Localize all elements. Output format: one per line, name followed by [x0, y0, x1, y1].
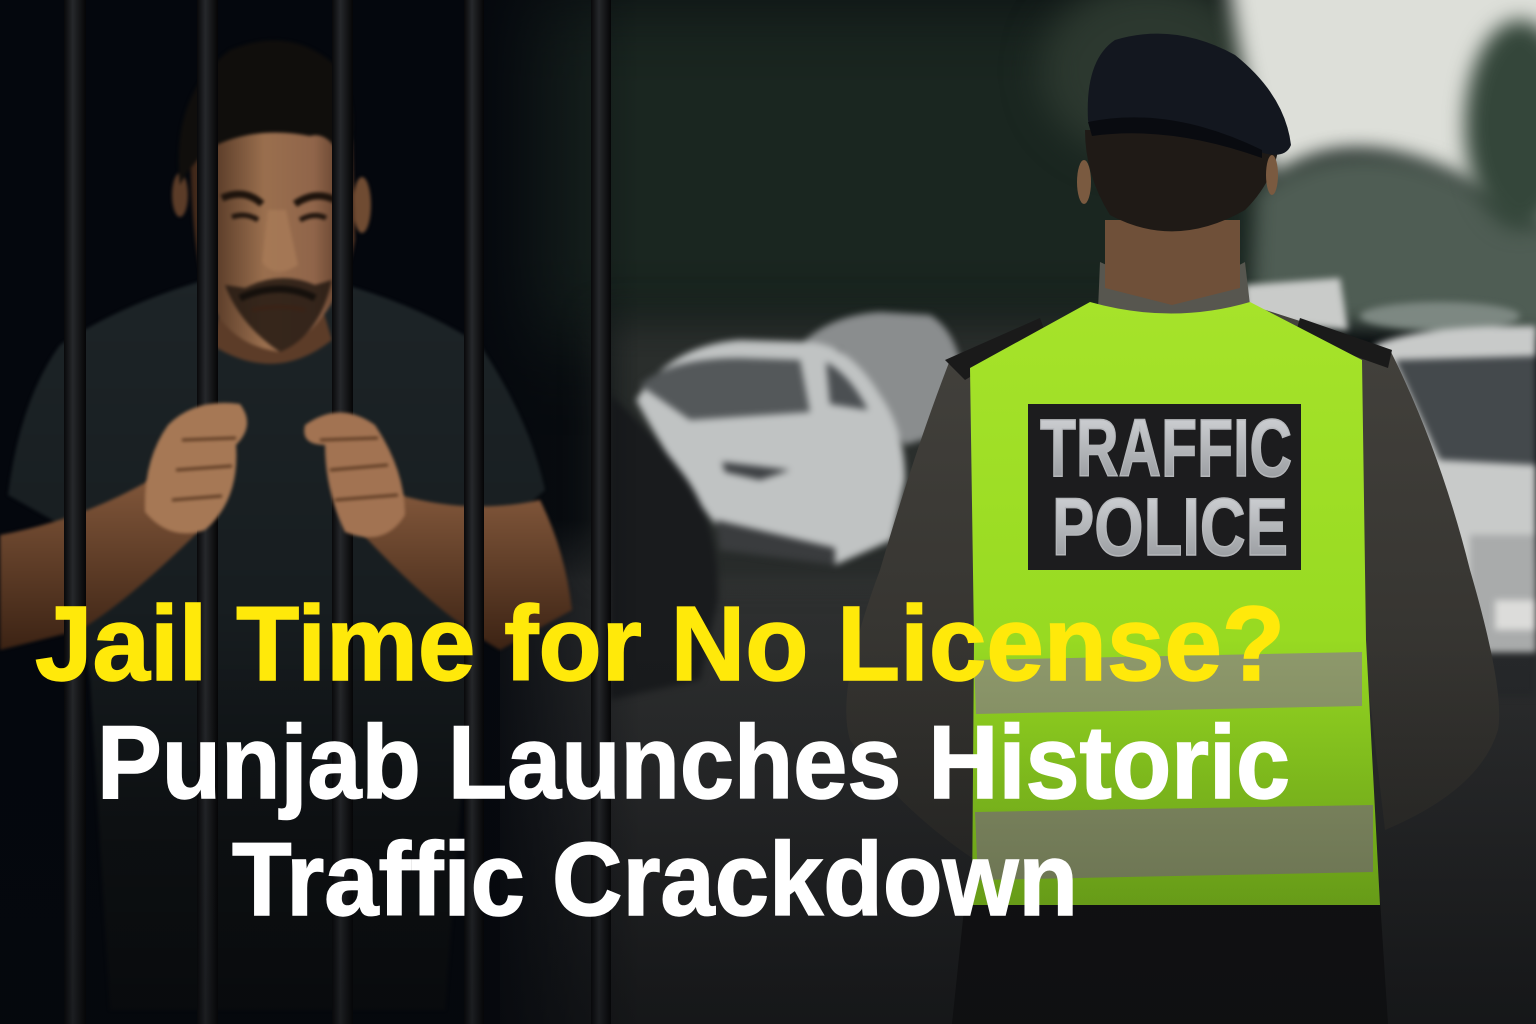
neck: [212, 300, 332, 364]
vest reflective band upper: [974, 652, 1362, 714]
neck and head: [1077, 130, 1280, 305]
right fist: [304, 412, 405, 537]
bottom shade: [0, 640, 1536, 1024]
nose: [262, 210, 298, 272]
vest label: traffic police: TRAFFIC: [1040, 403, 1292, 494]
right forearm: [350, 495, 572, 650]
headline line one: Jail Time for No License?: [35, 585, 1285, 703]
blurred parked cars: [610, 278, 1536, 700]
car: dark foreground vehicle: [610, 395, 718, 700]
prisoner figure: [0, 40, 572, 1010]
prison bars: [64, 0, 611, 1024]
hair: [179, 40, 353, 185]
left forearm: [0, 480, 205, 650]
vest reflective band lower: [975, 805, 1373, 880]
gripping fists: [145, 403, 405, 537]
torso: dark t-shirt: [8, 280, 545, 1010]
car: right white car: [1375, 326, 1536, 697]
vest label: traffic police: [1028, 403, 1301, 573]
car: far white sedan: [800, 312, 962, 445]
officer trousers: [952, 900, 1388, 1024]
left dark prison panel: [0, 0, 640, 1024]
vest label: traffic police: POLICE: [1052, 482, 1288, 573]
car: distant white van: [1245, 278, 1348, 330]
headline line two: Punjab Launches Historic: [97, 705, 1290, 821]
beard: [225, 278, 332, 352]
car: distant cars row: [1360, 302, 1520, 330]
car: near white sedan: [636, 340, 905, 565]
beret: [1088, 34, 1291, 155]
officer shirt and arms: [846, 280, 1499, 860]
traffic police officer: [846, 34, 1499, 1024]
high-visibility vest: [970, 302, 1380, 905]
title: [35, 585, 1290, 938]
left fist: [145, 403, 247, 533]
brows and eyes: [222, 194, 335, 204]
head: [172, 40, 371, 352]
shoulder straps: [945, 318, 1045, 380]
headline line three: Traffic Crackdown: [232, 822, 1078, 938]
